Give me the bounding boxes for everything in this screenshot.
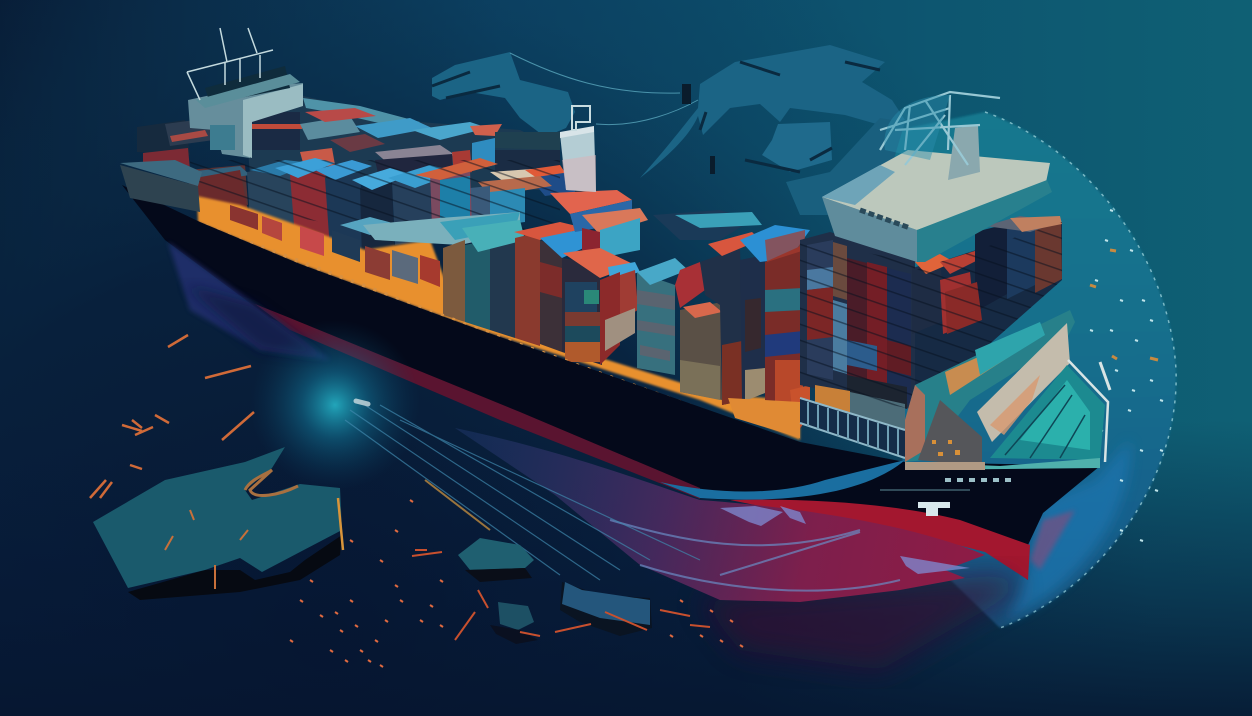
central column containers	[540, 190, 810, 435]
glowing light on water	[250, 320, 420, 490]
lower left tiles	[230, 205, 585, 346]
deck lashing marks	[205, 226, 795, 444]
small islands	[458, 538, 652, 644]
upper ridge containers	[245, 96, 575, 228]
red waterline stripe	[255, 304, 700, 499]
orange deck glow	[197, 196, 800, 440]
teal foredeck	[990, 365, 1105, 460]
mast	[880, 92, 1000, 165]
forward container block	[800, 216, 1062, 430]
bow deck	[800, 310, 1110, 470]
beige panel	[977, 323, 1070, 442]
container stacks	[137, 96, 810, 444]
hull of ship	[120, 160, 1100, 580]
red reflection on water	[168, 242, 1020, 670]
forward red hull	[730, 500, 1030, 580]
land mass bottom left	[93, 447, 343, 600]
blue arc reflection	[660, 460, 905, 500]
white funnel tower	[560, 106, 596, 192]
blue top row containers	[195, 158, 498, 270]
orange debris scatter	[90, 335, 743, 667]
forward superstructure	[822, 92, 1052, 262]
block tiles	[807, 240, 833, 380]
right continent lower block	[762, 122, 832, 172]
wake trails	[345, 401, 700, 580]
hull markings	[918, 502, 950, 516]
world map silhouettes, top	[432, 45, 905, 215]
orange base patch	[728, 398, 800, 438]
side band	[905, 310, 1075, 462]
small boats on map	[682, 84, 715, 174]
stern deck plating	[120, 165, 200, 212]
right continent eastern shelf	[786, 118, 905, 215]
stern bridge superstructure	[187, 28, 303, 158]
stern containers	[137, 118, 250, 205]
band lines on upper stacks	[190, 160, 560, 240]
shipping route lines	[510, 53, 698, 125]
water circle around bow	[860, 112, 1176, 628]
right continent upper	[640, 45, 905, 178]
railing section	[800, 398, 905, 458]
left continent	[432, 52, 575, 137]
bottom shading	[0, 420, 1252, 716]
deck rim	[905, 458, 1100, 470]
grey cargo deck	[918, 400, 982, 466]
